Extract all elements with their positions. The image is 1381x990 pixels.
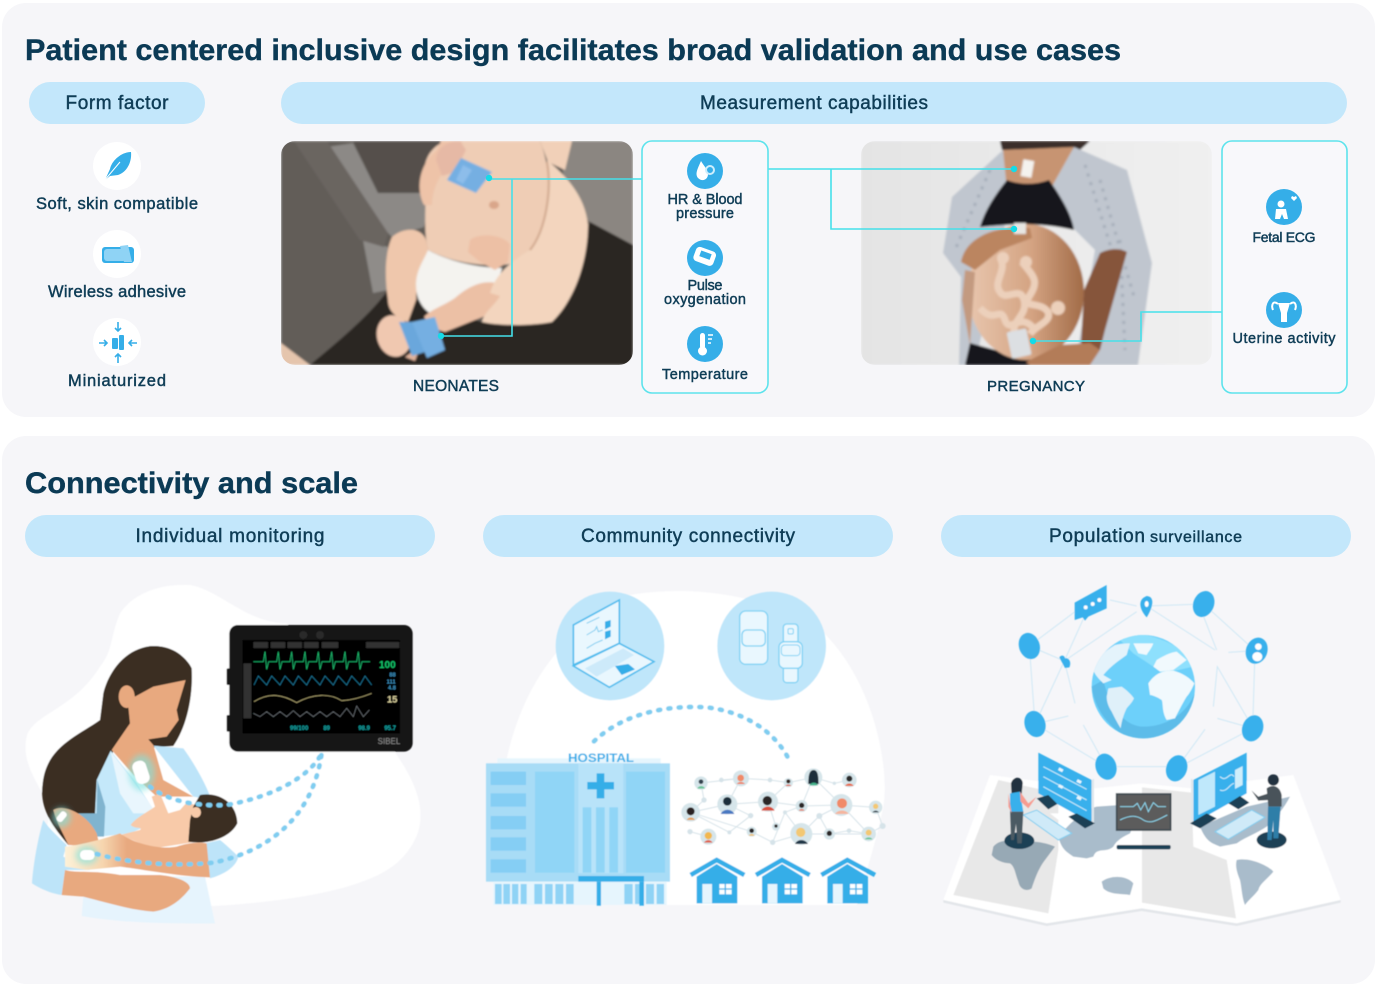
robe: white lining — [111, 752, 157, 813]
label: miniaturized: Miniaturized — [68, 372, 166, 390]
globe — [1092, 634, 1197, 740]
network links — [1029, 600, 1255, 768]
hospital sign: HOSPITAL — [568, 751, 634, 765]
robe: right front — [153, 746, 212, 800]
icon: wearable sensors circle — [717, 592, 826, 700]
tablet monitor: SIBEL — [378, 737, 401, 746]
tablet monitor: 111 — [387, 679, 395, 685]
icon: laptop circle — [556, 592, 664, 700]
baby ear — [191, 807, 201, 818]
label: pressure: pressure — [676, 206, 734, 222]
icon: temperature — [687, 326, 723, 362]
hospital cross — [587, 773, 614, 798]
photo: neonate with sensors — [281, 141, 633, 365]
tablet monitor: 95.7 — [384, 726, 397, 732]
forearm — [65, 833, 210, 877]
analyst: woman — [1004, 778, 1037, 849]
continents — [992, 841, 1055, 890]
illustration: community connectivity — [486, 591, 886, 906]
heading: measurement capabilities: Measurement capabilities — [700, 93, 928, 114]
upper arm — [53, 808, 100, 847]
heading: measurement capabilities — [281, 82, 1347, 124]
background dome — [495, 591, 885, 905]
label: uterine activity: Uterine activity — [1232, 331, 1336, 347]
panel: maternal and neonatal measures — [642, 141, 768, 393]
label: oxygenation: oxygenation — [664, 292, 746, 308]
label: pulse: Pulse — [688, 278, 722, 294]
label: temperature: Temperature — [662, 367, 748, 383]
respiration trace — [254, 693, 372, 703]
tablet monitor: 98.9 — [358, 726, 371, 732]
label: soft skin compatible: Soft, skin compatible — [36, 195, 198, 213]
panel: pregnancy measures — [1222, 141, 1347, 393]
sensors — [55, 759, 151, 860]
dotted links to tablet — [97, 753, 322, 864]
ECG trace — [253, 652, 370, 669]
heading: form factor: Form factor — [66, 93, 169, 114]
blanket — [82, 877, 215, 923]
world map sheet — [943, 775, 1341, 926]
form factor list — [36, 142, 198, 390]
network nodes — [1015, 588, 1267, 784]
icon: heart — [1059, 656, 1070, 668]
label: wireless adhesive: Wireless adhesive — [48, 283, 186, 301]
hospital building — [486, 751, 670, 906]
dotted link arc — [594, 707, 788, 758]
label: HR and blood pressure: HR & Blood — [668, 192, 742, 208]
icon: uterine activity — [1266, 292, 1302, 328]
robe: right sleeve — [205, 840, 238, 878]
baby head — [188, 794, 237, 843]
icon: fetal ECG — [1266, 189, 1302, 225]
houses — [691, 860, 875, 903]
community member avatars — [681, 768, 882, 845]
analyst: man — [1252, 774, 1287, 848]
tablet monitor: 15 — [387, 695, 397, 705]
heading: connectivity and scale: Connectivity and scale — [25, 467, 358, 500]
connector lines: pregnancy sensors — [768, 166, 1222, 344]
center monitor — [1117, 794, 1171, 849]
lower arm and hand — [62, 870, 190, 912]
icon: chat bubble — [1075, 585, 1107, 621]
robe: inner shade — [67, 780, 105, 837]
robe: left sleeve — [32, 820, 90, 895]
right monitor — [1190, 753, 1265, 839]
heading: population surveillance — [941, 515, 1351, 557]
ear — [119, 685, 135, 708]
hair front — [103, 646, 192, 720]
panel: connectivity and scale — [2, 436, 1375, 984]
panel: inclusive design — [2, 3, 1375, 417]
heading: individual monitoring: Individual monitoring — [136, 526, 324, 547]
icon: user node — [1242, 634, 1271, 667]
tablet monitor: 89 — [323, 726, 331, 732]
icon: feather — [93, 142, 141, 190]
icon: wireless adhesive — [93, 230, 141, 278]
caption: pregnancy: PREGNANCY — [987, 378, 1085, 395]
pleth trace — [254, 676, 372, 685]
mother face and chest — [112, 680, 193, 797]
hair back — [42, 646, 192, 845]
photo: pregnancy with sensors — [861, 141, 1212, 365]
tablet monitor — [227, 625, 413, 752]
baby body — [120, 793, 202, 848]
tablet monitor: 88 — [389, 673, 396, 679]
background blob — [25, 585, 421, 906]
robe: left front — [95, 751, 160, 837]
caption: neonates: NEONATES — [413, 378, 499, 395]
icon: miniaturized — [93, 318, 141, 366]
community network — [681, 768, 886, 845]
sensor glows — [52, 754, 155, 865]
left monitor — [1023, 753, 1095, 840]
tablet monitor: 99/100 — [290, 726, 309, 732]
icon: location pin — [1140, 596, 1152, 617]
heading: population surveillance: Population — [1049, 526, 1145, 547]
tablet monitor: 4.8 — [388, 686, 396, 692]
connector lines: neonate sensors — [438, 175, 642, 339]
heading: form factor — [29, 82, 205, 124]
heading: individual monitoring — [25, 515, 435, 557]
heading: community connectivity: Community connectivity — [581, 526, 796, 547]
illustration: population surveillance — [943, 585, 1341, 926]
heading: community connectivity — [483, 515, 893, 557]
icon: HR and blood pressure — [687, 153, 723, 189]
vital numbers: 100 — [379, 660, 396, 671]
heading: population surveillance: surveillance — [1150, 529, 1242, 546]
title: Patient centered inclusive design facilitates broad validation and use cases — [25, 34, 1121, 67]
illustration: individual monitoring — [25, 585, 421, 923]
icon: pulse oxygenation — [687, 240, 723, 276]
label: fetal ECG: Fetal ECG — [1252, 229, 1316, 245]
motion trace — [253, 706, 369, 717]
